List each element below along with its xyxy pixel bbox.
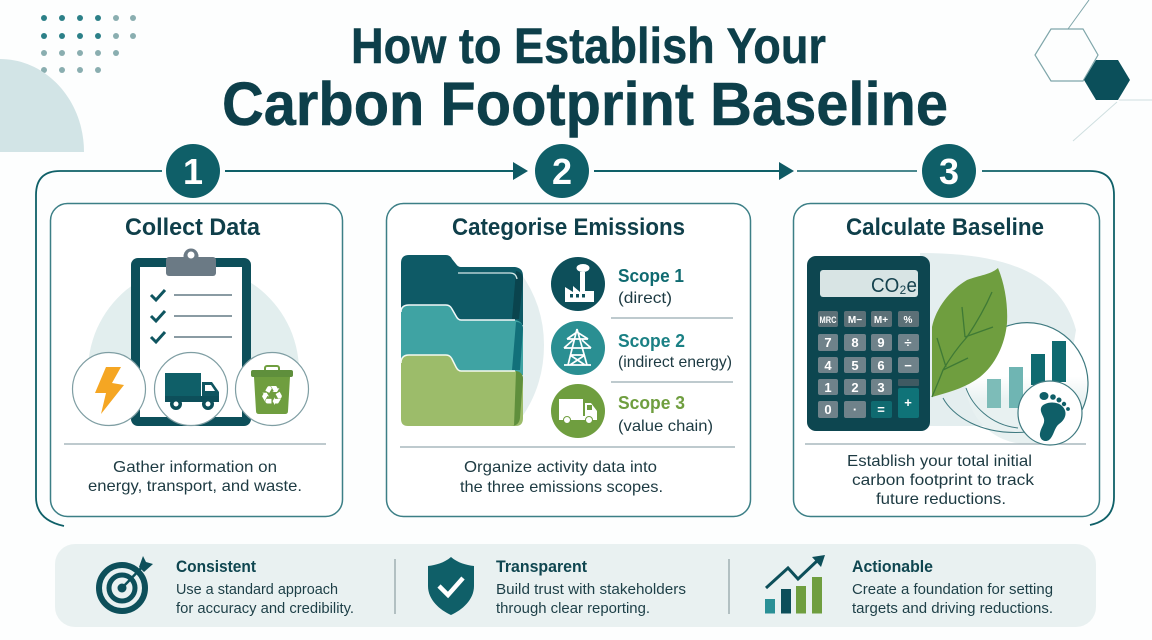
icon: calculator: 3: [877, 380, 885, 395]
principle: consistent: Consistent: [176, 558, 256, 576]
chart: footprint bars: [943, 322, 1088, 444]
description: Gather information on: [113, 459, 277, 476]
principle: consistent: Use a standard approach: [176, 581, 338, 598]
panel: collect data: [50, 204, 342, 516]
icon: calculator: M−: [848, 315, 862, 326]
principle: transparent: [428, 557, 686, 617]
icon: leaf: [932, 268, 1007, 397]
title: [222, 18, 948, 138]
icon: calculator: %: [904, 315, 913, 326]
icon: calculator: 9: [877, 335, 885, 350]
icon: calculator: 5: [851, 358, 859, 373]
scope 1: [551, 257, 684, 311]
icon: calculator: [807, 256, 930, 431]
icon: calculator: MRC: [820, 315, 837, 325]
description: carbon footprint to track: [852, 472, 1035, 489]
description: [847, 453, 1035, 508]
icon: calculator: 7: [824, 335, 832, 350]
illustration backdrop: [920, 253, 1076, 426]
icon: calculator: −: [904, 358, 912, 373]
icon: calculator: 0: [824, 402, 832, 417]
description: [88, 459, 302, 495]
principle: actionable: targets and driving reductions.: [852, 600, 1053, 617]
title: How to Establish Your: [351, 18, 826, 74]
icon: footprint: [1018, 381, 1082, 445]
icon: calculator: =: [877, 402, 885, 417]
principle: actionable: Create a foundation for setting: [852, 581, 1053, 598]
icon: calculator: 2: [851, 380, 859, 395]
panel: principles bar: [55, 544, 1096, 627]
step badge 2: 2: [552, 151, 572, 192]
scope 2: [551, 321, 732, 375]
panel: categorise emissions: [386, 204, 750, 516]
icon: calculator: 4: [824, 358, 832, 373]
icon: stacked folders: [401, 255, 523, 426]
icon: calculator: 1: [824, 380, 832, 395]
description: [460, 459, 663, 496]
icon: target: [99, 556, 153, 611]
icon: calculator: +: [904, 395, 912, 410]
icon: calculator: CO₂e: [871, 275, 917, 297]
heading: collect data: Collect Data: [125, 214, 260, 241]
principle: actionable: [765, 555, 1053, 617]
description: Establish your total initial: [847, 453, 1032, 470]
principle: transparent: through clear reporting.: [496, 600, 650, 617]
icon: recycling bin: ♻: [260, 381, 284, 412]
step badge 2: [535, 144, 589, 198]
icon: truck: [154, 352, 228, 426]
heading: calculate baseline: Calculate Baseline: [846, 214, 1044, 241]
heading: categorise emissions: Categorise Emissions: [452, 214, 685, 241]
principle: transparent: Transparent: [496, 558, 587, 576]
principle: transparent: Build trust with stakeholders: [496, 581, 686, 598]
description: future reductions.: [876, 491, 1006, 508]
icon: calculator: 6: [877, 358, 885, 373]
step badge 3: 3: [939, 151, 959, 192]
icon: recycling bin: [236, 352, 308, 426]
scope 1: Scope 1: [618, 266, 684, 286]
decoration: hexagons: [1035, 0, 1152, 141]
icon: clipboard: [131, 248, 251, 426]
icon: calculator: ÷: [904, 335, 912, 350]
description: energy, transport, and waste.: [88, 478, 302, 495]
description: the three emissions scopes.: [460, 479, 663, 496]
outer process frame and arrows: [36, 162, 1114, 526]
scope 3: Scope 3: [618, 393, 685, 413]
panel: calculate baseline: [794, 204, 1100, 516]
scope 3: (value chain): [618, 418, 713, 435]
icon: calculator: 8: [851, 335, 859, 350]
icon: lightning bolt: [72, 352, 146, 426]
description: Organize activity data into: [464, 459, 657, 476]
principle: actionable: Actionable: [852, 558, 933, 576]
scope 2: Scope 2: [618, 331, 685, 351]
icon: calculator: ·: [853, 402, 857, 417]
step badge 1: [166, 144, 220, 198]
principle: consistent: [99, 556, 354, 617]
title: Carbon Footprint Baseline: [222, 70, 948, 138]
step badge 1: 1: [183, 151, 203, 192]
icon: growth chart: [765, 555, 825, 614]
principle: consistent: for accuracy and credibility.: [176, 600, 354, 617]
scope 2: (indirect energy): [618, 354, 732, 371]
decoration: dot grid: [41, 15, 136, 73]
icon: shield: [428, 557, 474, 615]
scope 1: (direct): [618, 290, 672, 307]
icon: calculator: M+: [874, 315, 888, 326]
scope 3: [551, 384, 713, 438]
illustration backdrop: [88, 266, 299, 410]
decoration: quarter circle: [0, 59, 84, 152]
backdrop arc: [516, 272, 544, 425]
step badge 3: [922, 144, 976, 198]
